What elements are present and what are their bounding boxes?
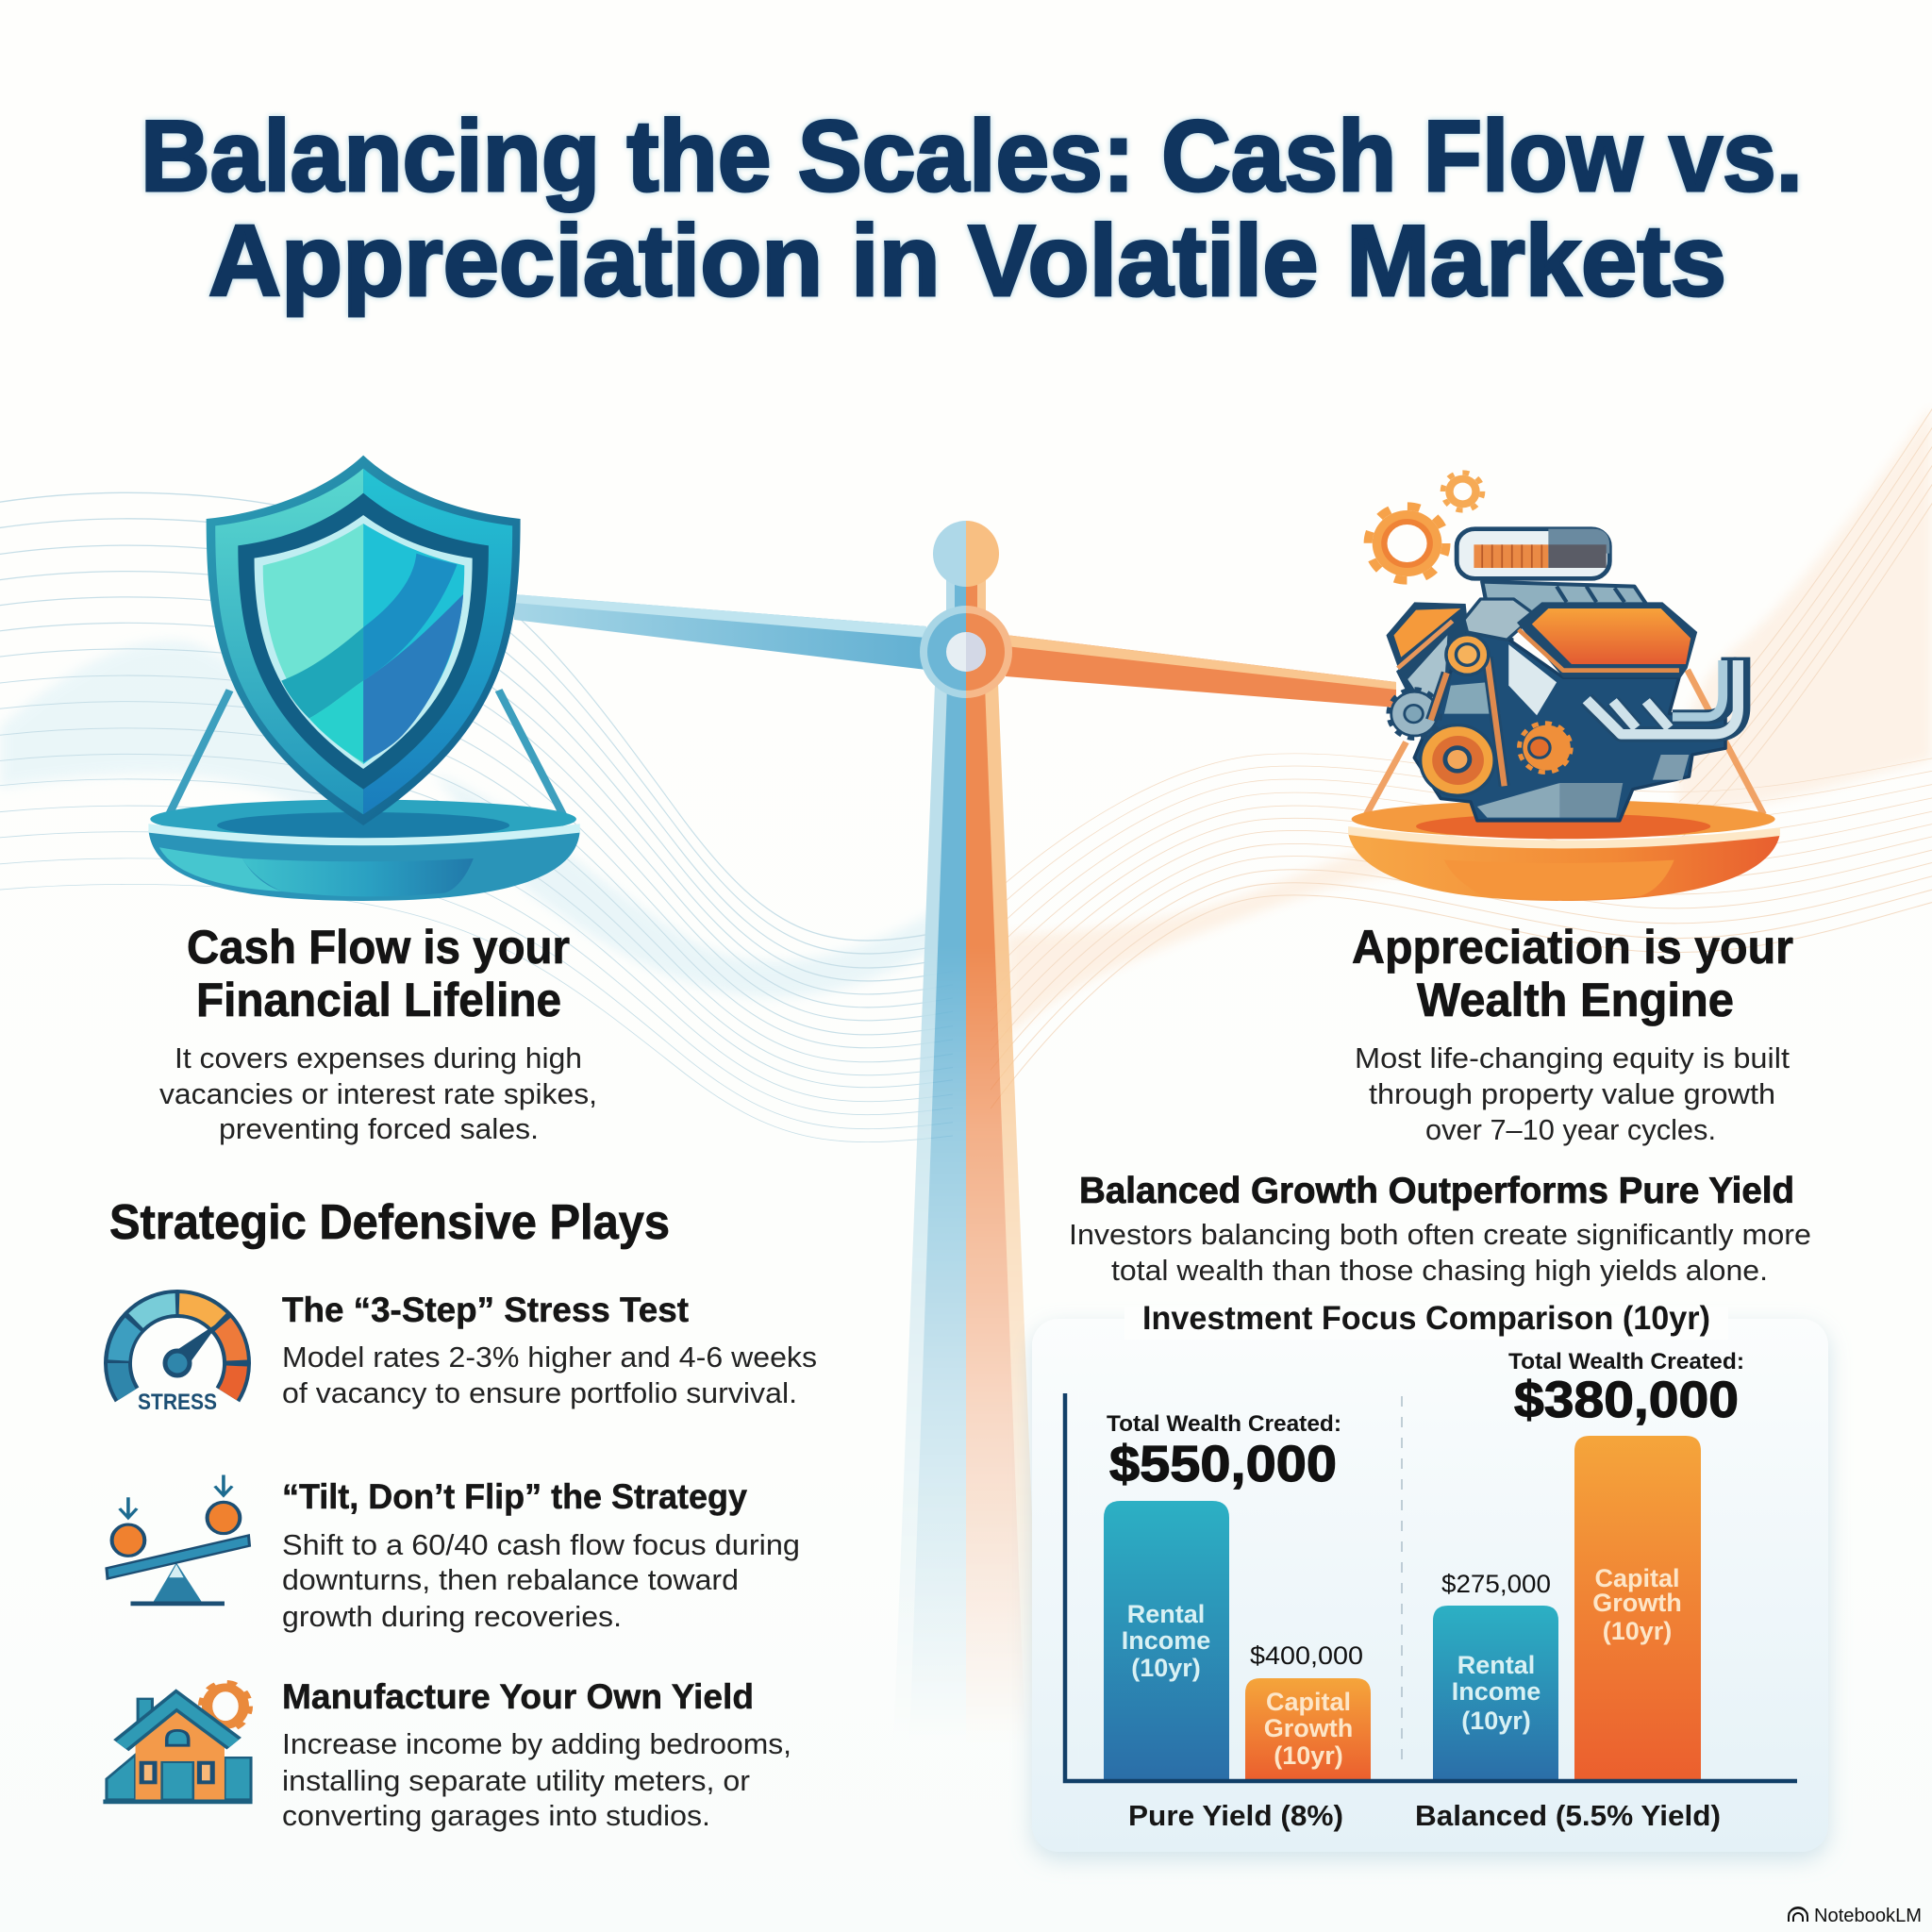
bar: pure yield rental income: Income bbox=[1122, 1626, 1210, 1655]
left beam bbox=[514, 594, 926, 670]
shield bbox=[207, 456, 521, 825]
title: Balancing the Scales: Cash Flow vs. bbox=[141, 99, 1803, 212]
appreciation body text: through property value growth bbox=[1369, 1077, 1775, 1110]
strategic defensive plays heading: Strategic Defensive Plays bbox=[109, 1195, 670, 1250]
right pan bbox=[1348, 800, 1780, 901]
bar: pure yield rental income: (10yr) bbox=[1131, 1654, 1201, 1682]
chart title: Investment Focus Comparison (10yr) bbox=[1142, 1300, 1710, 1337]
bar: balanced capital growth: Capital bbox=[1594, 1564, 1680, 1592]
pulleys, belt and small gears bbox=[1390, 635, 1571, 795]
stress test text bbox=[282, 1291, 817, 1409]
stress test text: Model rates 2-3% higher and 4-6 weeks bbox=[282, 1341, 817, 1374]
value labels: $275,000 bbox=[1441, 1570, 1551, 1598]
right pan strings bbox=[1366, 670, 1763, 814]
balanced growth heading: Balanced Growth Outperforms Pure Yield bbox=[1079, 1171, 1794, 1211]
title bbox=[141, 99, 1803, 317]
chart axes bbox=[1065, 1393, 1797, 1781]
category labels bbox=[1128, 1799, 1721, 1832]
manufacture text: installing separate utility meters, or bbox=[282, 1764, 750, 1797]
bar: pure yield capital growth bbox=[1245, 1678, 1371, 1780]
engine on right scale pan bbox=[1348, 473, 1780, 901]
bar: balanced rental income: Income bbox=[1452, 1677, 1541, 1706]
left column heading: cash flow bbox=[187, 921, 570, 1026]
tilt text: downturns, then rebalance toward bbox=[282, 1563, 739, 1596]
play 3: manufacture yield bbox=[103, 1677, 791, 1832]
icon: tilted seesaw bbox=[107, 1475, 249, 1604]
bar: balanced capital growth bbox=[1574, 1436, 1701, 1780]
panel: investment focus comparison chart bbox=[1032, 1300, 1828, 1852]
right beam bbox=[1006, 635, 1396, 708]
balanced growth body text: Investors balancing both often create significantly more bbox=[1069, 1218, 1811, 1251]
value labels bbox=[1250, 1570, 1551, 1670]
balanced growth body text bbox=[1069, 1218, 1811, 1287]
total wealth: balanced: Total Wealth Created: bbox=[1508, 1349, 1744, 1374]
bar: balanced capital growth: (10yr) bbox=[1603, 1617, 1672, 1645]
bar: pure yield capital growth: Growth bbox=[1264, 1714, 1353, 1742]
icon: stress gauge bbox=[118, 1304, 237, 1415]
total wealth: pure yield: $550,000 bbox=[1109, 1436, 1337, 1492]
bar: pure yield rental income bbox=[1104, 1501, 1229, 1780]
total wealth: balanced: $380,000 bbox=[1514, 1372, 1739, 1428]
value labels: $400,000 bbox=[1250, 1641, 1363, 1670]
NotebookLM watermark: NotebookLM bbox=[1814, 1906, 1922, 1926]
balance scale post and beam bbox=[514, 521, 1396, 1745]
manufacture text: Manufacture Your Own Yield bbox=[282, 1677, 754, 1716]
tilt text: Shift to a 60/40 cash flow focus during bbox=[282, 1528, 800, 1561]
left pan bbox=[148, 800, 580, 901]
bar: pure yield capital growth: (10yr) bbox=[1274, 1741, 1343, 1770]
right column heading: appreciation: Appreciation is your bbox=[1352, 921, 1793, 974]
tilt text: growth during recoveries. bbox=[282, 1600, 622, 1633]
background wave lines and ribbons bbox=[0, 377, 1932, 1142]
stress test text: of vacancy to ensure portfolio survival. bbox=[282, 1376, 797, 1409]
icon: house with gear bbox=[103, 1683, 253, 1802]
cash flow body text: vacancies or interest rate spikes, bbox=[159, 1077, 597, 1110]
appreciation body text: over 7–10 year cycles. bbox=[1425, 1113, 1716, 1146]
total wealth: balanced bbox=[1508, 1349, 1744, 1428]
play 1: stress test bbox=[118, 1291, 817, 1415]
chart card bbox=[1032, 1319, 1828, 1852]
bar: balanced rental income: Rental bbox=[1457, 1651, 1535, 1679]
right column heading: appreciation: Wealth Engine bbox=[1417, 974, 1734, 1026]
gears above the engine bbox=[1368, 473, 1483, 580]
title: Appreciation in Volatile Markets bbox=[208, 204, 1726, 317]
manufacture text bbox=[282, 1677, 791, 1832]
bar: pure yield rental income: Rental bbox=[1127, 1600, 1205, 1628]
scale post bbox=[899, 685, 1032, 1694]
bar: balanced capital growth: Growth bbox=[1592, 1589, 1682, 1617]
cash flow body text bbox=[159, 1041, 597, 1145]
shield on left scale pan bbox=[148, 456, 580, 901]
bar: balanced rental income bbox=[1433, 1606, 1558, 1780]
icon: stress gauge: STRESS bbox=[138, 1390, 217, 1415]
appreciation body text bbox=[1355, 1041, 1790, 1146]
cash flow body text: It covers expenses during high bbox=[175, 1041, 582, 1074]
balanced growth body text: total wealth than those chasing high yields alone. bbox=[1111, 1254, 1768, 1287]
cash flow body text: preventing forced sales. bbox=[219, 1112, 539, 1145]
tilt text bbox=[282, 1477, 800, 1633]
total wealth: pure yield: Total Wealth Created: bbox=[1107, 1411, 1341, 1437]
bar: pure yield capital growth: Capital bbox=[1266, 1688, 1351, 1716]
exhaust pipes bbox=[1587, 658, 1742, 734]
stress test text: The “3-Step” Stress Test bbox=[282, 1291, 689, 1329]
appreciation body text: Most life-changing equity is built bbox=[1355, 1041, 1790, 1074]
centre joint bbox=[920, 606, 1012, 698]
group divider bbox=[1401, 1396, 1403, 1768]
total wealth: pure yield bbox=[1107, 1411, 1341, 1492]
right column heading: appreciation bbox=[1352, 921, 1793, 1026]
manufacture text: converting garages into studios. bbox=[282, 1799, 710, 1832]
post top knob bbox=[933, 521, 999, 623]
category labels: Balanced (5.5% Yield) bbox=[1415, 1799, 1721, 1832]
left column heading: cash flow: Cash Flow is your bbox=[187, 921, 570, 974]
tilt text: “Tilt, Don’t Flip” the Strategy bbox=[282, 1477, 747, 1516]
left pan strings bbox=[168, 691, 564, 816]
bar: balanced rental income: (10yr) bbox=[1461, 1707, 1531, 1735]
category labels: Pure Yield (8%) bbox=[1128, 1799, 1343, 1832]
left column heading: cash flow: Financial Lifeline bbox=[196, 974, 561, 1026]
manufacture text: Increase income by adding bedrooms, bbox=[282, 1727, 791, 1760]
engine block bbox=[1386, 529, 1725, 821]
play 2: tilt don't flip bbox=[107, 1475, 800, 1633]
